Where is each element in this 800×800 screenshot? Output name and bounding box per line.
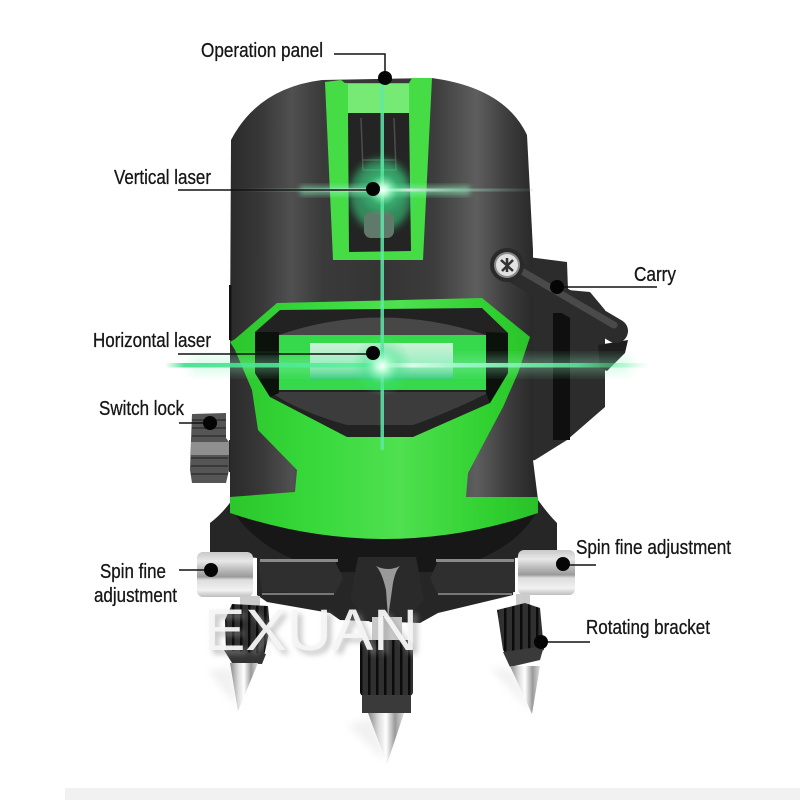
device: laser level bbox=[165, 78, 650, 764]
spike shadows bbox=[208, 668, 532, 762]
callout: Horizontal laser: Horizontal laser bbox=[93, 330, 211, 352]
operation panel dark recess bbox=[348, 113, 411, 252]
window laser screen bbox=[310, 343, 453, 380]
callout: Switch lock: Switch lock bbox=[99, 398, 185, 420]
operation panel green frame bbox=[325, 78, 432, 260]
callout: Rotating bracket bbox=[534, 617, 710, 649]
callout: Spin fine adjustment left: Spin fine bbox=[100, 561, 166, 583]
base centre bracket bbox=[350, 557, 424, 622]
window side shadows bbox=[255, 332, 508, 403]
callout: Spin fine adjustment left bbox=[94, 561, 218, 607]
base arm right bbox=[430, 559, 515, 595]
base plate bbox=[210, 500, 557, 623]
laser cross lower bbox=[165, 336, 650, 396]
vertical laser beam bbox=[380, 78, 384, 450]
callout: Carry bbox=[550, 264, 676, 294]
callout: Spin fine adjustment right bbox=[556, 537, 731, 571]
silver knob left bbox=[197, 552, 253, 597]
watermark: EXUAN bbox=[208, 602, 422, 667]
callout: Operation panel bbox=[201, 40, 392, 85]
carry handle bar bbox=[490, 248, 628, 371]
callout: Operation panel: Operation panel bbox=[201, 40, 323, 62]
window lower arc bbox=[270, 392, 490, 425]
callout: Horizontal laser bbox=[93, 330, 380, 360]
bottom grey strip bbox=[65, 788, 800, 800]
centre bracket highlight bbox=[376, 566, 400, 618]
foot centre bbox=[360, 617, 413, 764]
beam soft glow bbox=[190, 358, 630, 372]
callout: Spin fine adjustment left: adjustment bbox=[94, 585, 177, 607]
base arm left bbox=[258, 559, 343, 595]
housing body bbox=[230, 78, 538, 538]
recess glow bbox=[350, 159, 412, 231]
switch lock knob bbox=[190, 413, 232, 483]
callout: Switch lock bbox=[99, 398, 217, 430]
silver knob right bbox=[518, 550, 575, 595]
recess rails bbox=[361, 118, 396, 170]
callout: Spin fine adjustment right: Spin fine adjustment bbox=[576, 537, 731, 559]
callout: Vertical laser bbox=[114, 167, 380, 196]
laser cross upper bbox=[233, 164, 533, 216]
front window recess bbox=[255, 308, 508, 437]
recess button bbox=[364, 212, 394, 238]
foot left bbox=[224, 596, 270, 711]
window inner green panel bbox=[279, 335, 486, 390]
left edge notch bbox=[229, 285, 232, 340]
watermark: EXUAN bbox=[204, 598, 418, 663]
callout: Carry: Carry bbox=[634, 264, 676, 286]
operation panel light top bbox=[348, 84, 409, 114]
callout: Vertical laser: Vertical laser bbox=[114, 167, 211, 189]
green lower band and front housing bbox=[230, 298, 538, 539]
carry handle housing bbox=[525, 257, 605, 462]
foot right bbox=[497, 594, 544, 714]
callout: Rotating bracket: Rotating bracket bbox=[586, 617, 710, 639]
window upper arc bbox=[279, 318, 486, 335]
